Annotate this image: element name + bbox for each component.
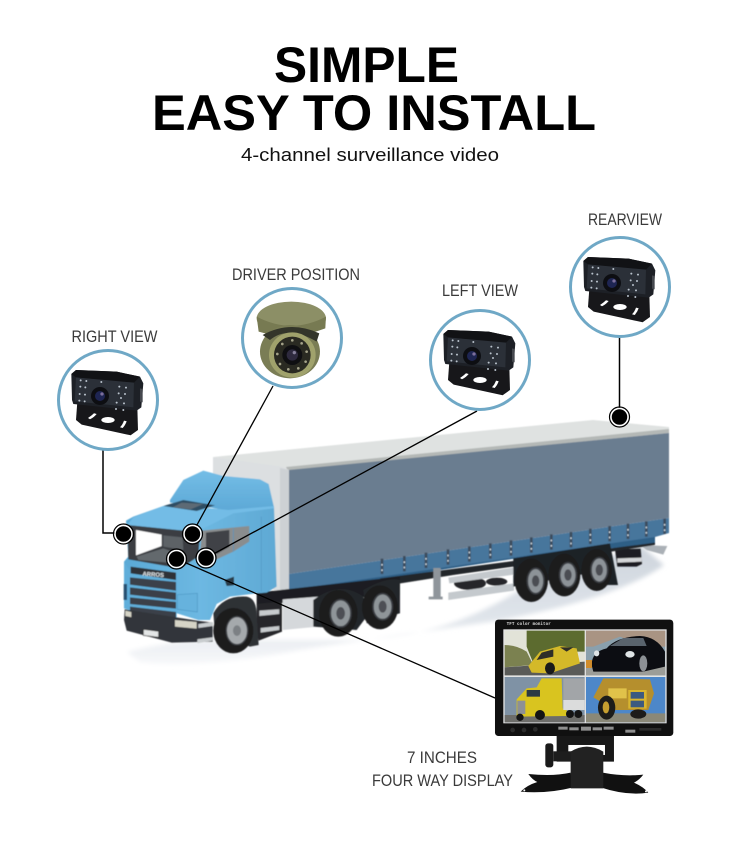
connector lines [103,337,620,698]
screen: yellow truck [505,677,585,722]
truck tractor: ARROS [142,572,164,579]
camera callout: left view: LEFT VIEW [442,281,518,300]
screen: black sports car [586,631,665,675]
camera callout: left view [430,281,530,410]
camera callout: rearview [570,210,670,336]
truck illustration [124,420,669,653]
ground shadow [127,545,664,664]
camera callout: right view [58,327,158,450]
trailer buckles [381,519,666,574]
monitor body [495,620,673,736]
front wheel [213,597,259,647]
icon: dome camera [257,302,326,378]
cab body [124,506,277,620]
camera callout: driver position [232,265,360,388]
marker dots [115,408,628,568]
truck tractor [124,471,400,653]
title [152,37,596,141]
screen: yellow dump truck [586,677,665,722]
screen: yellow hatchback [505,631,585,675]
camera callout: right view: RIGHT VIEW [72,327,158,346]
marker rings [114,407,630,569]
side window [200,526,249,559]
monitor buttons [510,727,661,733]
grille [124,562,177,627]
title: EASY TO INSTALL [152,85,596,141]
cab roof deflector [170,471,274,512]
bumper and headlights [124,609,213,643]
windshield [127,525,200,568]
monitor stand [521,735,648,794]
trailer undercarriage [380,543,667,602]
monitor caption [372,748,513,790]
monitor caption: 7 INCHES [407,748,477,767]
trailer body [213,420,669,600]
camera callout: driver position: DRIVER POSITION [232,265,360,284]
camera callout: rearview: REARVIEW [588,210,662,229]
monitor: TFT color monitor [507,622,551,627]
subtitle: 4-channel surveillance video [241,145,499,165]
monitor caption: FOUR WAY DISPLAY [372,771,513,790]
title: SIMPLE [274,37,459,93]
monitor [495,620,673,794]
